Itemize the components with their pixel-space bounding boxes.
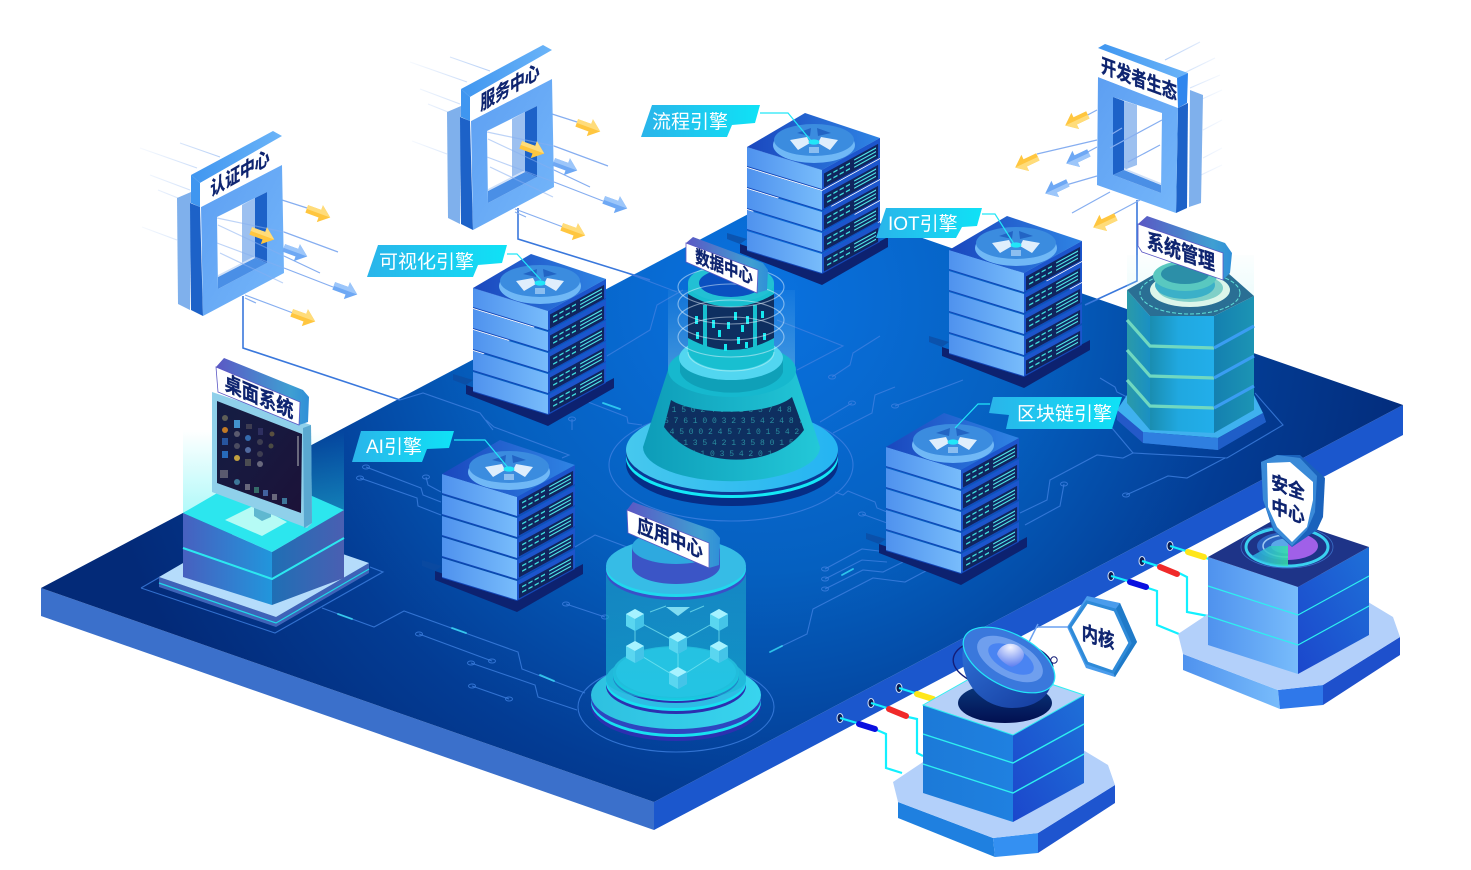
gate: 服务中心 xyxy=(410,45,630,244)
callout: 区块链引擎 xyxy=(955,397,1122,429)
callout: 流程引擎 xyxy=(641,105,812,142)
data center tower: 1 4 5 0 0 2 4 5 7 1 0 1 5 4 2 6 1 3 5 7 4 8 xyxy=(660,428,867,437)
server: 可视化引擎 xyxy=(453,254,614,426)
circuit traces xyxy=(141,273,1283,752)
data center tower: 7 6 1 3 5 4 2 1 3 5 8 0 1 5 2 0 6 4 7 3 1 9 xyxy=(664,439,871,448)
hexagon label: 内核: 内核 xyxy=(1082,621,1115,653)
callout: IOT引擎: IOT引擎 xyxy=(888,213,958,235)
shield label: 安全中心: 中心 xyxy=(1271,495,1305,528)
label: 数据中心: 数据中心 xyxy=(695,246,753,288)
desktop pedestal and monitor xyxy=(159,392,369,627)
application center xyxy=(591,530,761,741)
callout: 流程引擎: 流程引擎 xyxy=(652,111,728,133)
kernel base and stack xyxy=(893,665,1115,857)
server: 区块链引擎 xyxy=(866,413,1027,585)
callout: 可视化引擎: 可视化引擎 xyxy=(379,251,474,273)
platform board xyxy=(41,192,1403,830)
server: AI引擎 xyxy=(422,440,583,612)
server: 流程引擎 xyxy=(727,113,888,285)
security base and stack xyxy=(1178,517,1400,709)
gate: 开发者生态 xyxy=(1011,42,1222,236)
server: IOT引擎 xyxy=(929,216,1090,388)
label: 系统管理 xyxy=(1138,216,1232,280)
data center tower: 5 7 6 1 0 0 3 2 3 5 4 2 4 8 7 3 1 5 5 0 0 2 xyxy=(664,417,871,426)
gate: 开发者生态: 开发者生态 xyxy=(1101,53,1177,104)
gate: 服务中心: 服务中心 xyxy=(480,59,540,115)
callout: 区块链引擎: 区块链引擎 xyxy=(1017,403,1112,425)
kernel sphere xyxy=(951,614,1065,708)
data center tower: 0 1 5 0 2 4 6 8 1 3 5 7 4 8 7 0 1 5 4 6 5 7 xyxy=(662,406,869,415)
callout: 可视化引擎 xyxy=(367,245,541,280)
shield label: 安全中心 xyxy=(1261,455,1325,547)
label: 数据中心 xyxy=(686,237,768,293)
data center tower: 2 4 8 7 1 0 3 5 4 2 0 1 5 7 6 3 2 4 8 0 1 5 xyxy=(662,450,869,459)
gate: 认证中心: 认证中心 xyxy=(210,145,270,201)
callout: IOT引擎 xyxy=(876,208,1014,244)
kernel wires xyxy=(837,684,945,773)
gate: 认证中心 xyxy=(140,131,360,330)
label: 应用中心: 应用中心 xyxy=(637,513,703,562)
security wires xyxy=(1108,542,1212,634)
shield label: 安全中心: 安全 xyxy=(1271,471,1305,504)
connector lines from gates to platform xyxy=(243,200,1137,400)
label: 应用中心 xyxy=(627,502,720,568)
label: 系统管理: 系统管理 xyxy=(1147,228,1215,276)
data center tower xyxy=(626,269,838,506)
callout: AI引擎 xyxy=(352,431,510,470)
label: 桌面系统 xyxy=(216,358,309,425)
hexagon label: 内核 xyxy=(1038,596,1137,677)
label: 桌面系统: 桌面系统 xyxy=(225,371,294,424)
callout: AI引擎: AI引擎 xyxy=(366,436,422,458)
tower: 系统管理 xyxy=(1117,255,1266,450)
